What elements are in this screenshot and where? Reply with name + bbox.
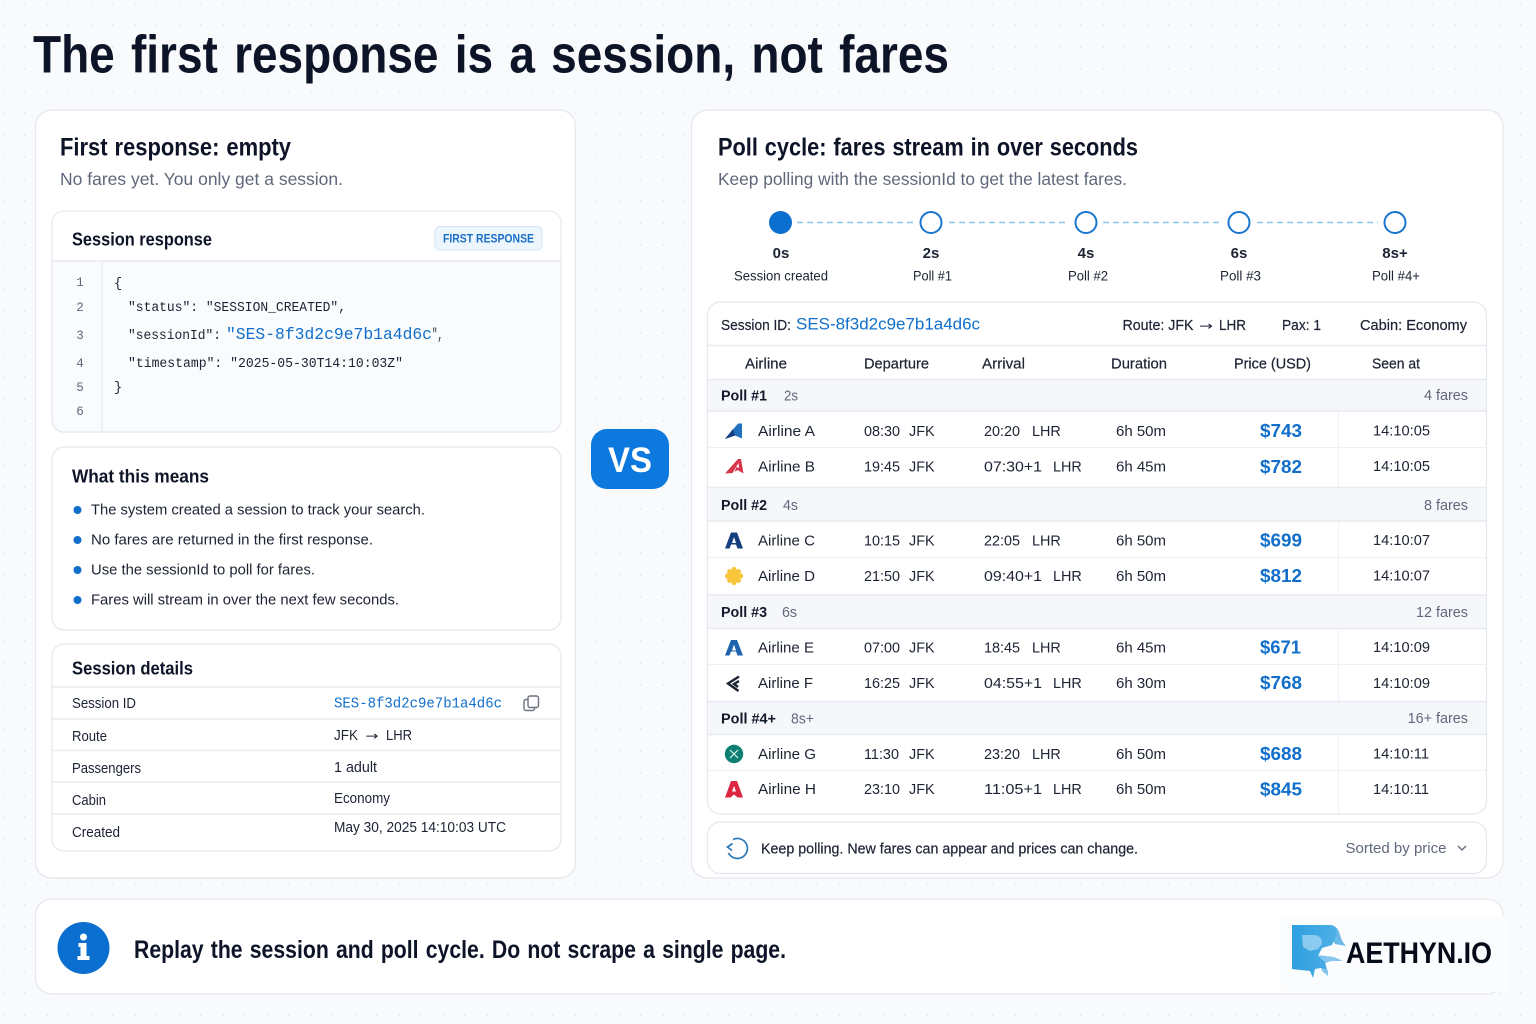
poll 4 band: Poll #4+ [721,712,776,728]
row: airline H: 23:10 [864,782,900,798]
step: 6s: Poll #3 [1220,268,1261,284]
step: 4s [1068,212,1108,284]
details rows: → [366,729,378,743]
fare table [708,302,1486,814]
step: 4s: 4s [1078,245,1094,262]
session summary bar: Cabin: Economy [1360,318,1468,334]
step: 8s+: 8s+ [1382,245,1408,262]
row: airline A [725,421,1430,441]
session summary bar: SES-8f3d2c9e7b1a4d6c [796,314,980,334]
row: airline C: LHR [1032,534,1061,550]
code block: JSON response: "timestamp": "2025-05-30T14:10:03Z" [128,357,403,372]
card: session details [52,644,561,851]
row: airline E: JFK [909,640,935,656]
icon: airline B [725,459,744,474]
row: airline D: 09:40+1 [984,569,1042,585]
row: airline F [728,673,1430,693]
row: airline H: 6h 50m [1116,782,1166,798]
row: airline H [725,780,1429,800]
row: airline C: 22:05 [984,534,1020,550]
row: airline D: $812 [1260,566,1302,586]
row: airline A: $743 [1260,421,1302,441]
row: airline G: JFK [909,747,935,763]
row: airline H: 11:05+1 [984,782,1042,798]
badge: first response [435,226,542,250]
details rows: Session ID [72,696,136,712]
panel: first response [36,110,576,878]
status bar: keep polling: Sorted by price [1346,841,1446,857]
icon: refresh [728,838,747,858]
details rows: 1 adult [334,760,377,776]
bullet list: Use the sessionId to poll for fares. [91,562,315,578]
step: 8s+: Poll #4+ [1372,268,1420,284]
panel heading: First response: empty [60,134,291,162]
row: airline C: 14:10:07 [1373,533,1430,549]
row: airline C: Airline C [758,534,815,550]
poll 2 band [721,498,1468,514]
session summary bar: Route: JFK [1122,318,1194,334]
code block: JSON response: 3 [76,329,84,343]
poll 3 band: Poll #3 [721,605,767,621]
icon: airline E [725,640,743,656]
poll 2 band: Poll #2 [721,498,767,514]
badge: VS [591,429,669,489]
row: airline H: $845 [1260,780,1302,800]
row: airline F: $768 [1260,673,1302,693]
code block: JSON response: 1 [76,276,84,290]
row: airline D: LHR [1053,569,1082,585]
row: airline B: $782 [1260,457,1302,477]
poll 2 band: 4s [783,498,798,514]
table header [745,356,1420,372]
code block: JSON response: } [114,381,122,396]
details rows: May 30, 2025 14:10:03 UTC [334,820,506,836]
row: airline B: JFK [909,460,935,476]
row: airline B: 14:10:05 [1373,459,1430,475]
row: airline E: 14:10:09 [1373,640,1430,656]
step: 4s: Poll #2 [1068,268,1108,284]
status bar: keep polling: Keep polling. New fares can appear and prices can change. [761,842,1138,858]
row: airline B: 19:45 [864,460,900,476]
step: 6s [1220,212,1261,284]
session summary bar: Pax: 1 [1282,318,1321,334]
poll 4 band: 8s+ [791,712,814,728]
row: airline E: Airline E [758,640,814,656]
bullet list: Fares will stream in over the next few seconds. [91,592,399,608]
row: airline D [725,566,1430,586]
step: 8s+ [1372,212,1420,284]
row: airline G: 6h 50m [1116,747,1166,763]
card: what this means [52,447,561,630]
row: airline G: 23:20 [984,747,1020,763]
step: 2s: 2s [923,245,939,262]
code block: JSON response: ", [432,326,443,344]
row: airline G: $688 [1260,744,1302,764]
icon: airline C [725,532,743,548]
row: airline D: Airline D [758,569,815,585]
details rows: JFK [334,728,358,744]
table header: Price (USD) [1234,356,1311,372]
poll 1 band: 4 fares [1424,388,1468,404]
step: 6s: 6s [1231,245,1247,262]
row: airline H: 14:10:11 [1373,782,1429,798]
row: airline C [725,530,1430,550]
poll 3 band: 12 fares [1416,605,1468,621]
poll 2 band: 8 fares [1424,498,1468,514]
row: airline D: 6h 50m [1116,569,1166,585]
icon: chevron [1458,846,1466,850]
row: airline B: 07:30+1 [984,460,1042,476]
badge: first response: FIRST RESPONSE [443,232,534,246]
code block: JSON response: { [114,277,122,292]
row: airline F: Airline F [758,676,813,692]
row: airline B: 6h 45m [1116,460,1166,476]
bullet list: The system created a session to track your search. [91,502,425,518]
row: airline A: JFK [909,424,935,440]
logo: AETHYN.IO [1279,916,1509,992]
row: airline A: Airline A [758,424,815,440]
icon: info [58,922,110,974]
poll 4 band [721,711,1468,728]
row: airline F: 6h 30m [1116,676,1166,692]
heading: session response: Session response [72,230,212,250]
row: airline F: 16:25 [864,676,900,692]
code block: JSON response [76,276,443,419]
row: airline E [725,638,1430,658]
panel subtitle: No fares yet. You only get a session. [60,169,343,189]
row: airline G [725,744,1429,764]
table header: Departure [864,356,929,372]
details rows: LHR [386,728,412,744]
poll 3 band [721,605,1468,621]
icon: airline D [725,567,743,585]
session summary bar: LHR [1219,318,1246,334]
row: airline A: LHR [1032,424,1061,440]
row: airline F: LHR [1053,676,1082,692]
row: airline E: 6h 45m [1116,640,1166,656]
status bar: keep polling [708,822,1486,874]
row: airline B: Airline B [758,460,815,476]
icon: copy [524,696,538,710]
panel: poll cycle [692,110,1503,878]
step: 0s [734,211,828,284]
row: airline C: $699 [1260,530,1302,550]
step: 0s: Session created [734,268,828,284]
session summary bar [721,314,1468,334]
heading: session details: Session details [72,658,193,678]
row: airline G: LHR [1032,747,1061,763]
logo mark [1292,925,1346,978]
table header: Airline [745,356,787,372]
row: airline C: 6h 50m [1116,534,1166,550]
details rows: Economy [334,791,391,807]
row: airline A: 6h 50m [1116,424,1166,440]
row: airline F: 04:55+1 [984,676,1042,692]
code block: JSON response: 4 [76,357,84,371]
row: airline C: JFK [909,534,935,550]
row: airline H: Airline H [758,782,816,798]
code block: JSON response: "sessionId": [128,329,221,344]
details rows [72,696,506,841]
step: 2s: Poll #1 [913,268,952,284]
row: airline E: LHR [1032,640,1061,656]
details rows: Cabin [72,793,106,809]
poll 4 band: 16+ fares [1408,711,1468,727]
code block: JSON response: "status": "SESSION_CREATED", [128,301,346,316]
row: airline E: 07:00 [864,640,900,656]
row: airline D: JFK [909,569,935,585]
bullet list [74,502,425,608]
icon: airline A [725,424,742,439]
row: airline D: 14:10:07 [1373,568,1430,584]
row: airline G: 11:30 [864,747,899,763]
row: airline G: Airline G [758,747,816,763]
icon: airline F [728,676,739,691]
row: airline G: 14:10:11 [1373,746,1429,762]
takeaway text: Replay the session and poll cycle. Do not scrape a single page. [134,936,786,964]
row: airline F: 14:10:09 [1373,676,1430,692]
logo wordmark: AETHYN.IO [1346,937,1492,970]
code block: JSON response: "SES-8f3d2c9e7b1a4d6c [226,325,432,344]
timeline [734,211,1420,284]
poll 1 band [721,388,1468,404]
card: session response [52,211,561,432]
row: airline E: $671 [1260,638,1301,658]
session summary bar: Session ID: [721,318,791,334]
details rows: Created [72,825,120,841]
code block: JSON response: 2 [76,301,84,315]
row: airline D: 21:50 [864,569,900,585]
title: The first response is a session, not fares [33,26,949,84]
icon: airline H [725,781,743,798]
poll 1 band: 2s [784,388,798,404]
step: 0s: 0s [773,245,789,262]
row: airline F: JFK [909,676,935,692]
row: airline A: 14:10:05 [1373,424,1430,440]
heading: what this means: What this means [72,466,209,486]
row: airline A: 08:30 [864,424,900,440]
details rows: Passengers [72,761,141,777]
bullet list: No fares are returned in the first response. [91,532,373,548]
row: airline C: 10:15 [864,534,900,550]
step: 2s [913,212,952,284]
poll 1 band: Poll #1 [721,388,767,404]
row: airline A: 20:20 [984,424,1020,440]
row: airline E: 18:45 [984,640,1020,656]
badge: VS: VS [608,441,652,480]
icon: airline G [725,745,743,763]
row: airline B [725,457,1430,477]
session summary bar: → [1199,319,1213,333]
poll 3 band: 6s [782,605,797,621]
details rows: Route [72,729,107,745]
code block: JSON response: 6 [76,405,84,419]
table header: Duration [1111,356,1167,372]
row: airline B: LHR [1053,460,1082,476]
panel heading: Poll cycle: fares stream in over seconds [718,134,1138,162]
table header: Arrival [982,356,1025,372]
table header: Seen at [1372,356,1420,372]
row: airline H: LHR [1053,782,1082,798]
details rows: SES-8f3d2c9e7b1a4d6c [334,696,502,712]
code block: JSON response: 5 [76,381,84,395]
panel: takeaway [36,899,1503,994]
row: airline H: JFK [909,782,935,798]
panel subtitle: Keep polling with the sessionId to get the latest fares. [718,169,1127,189]
